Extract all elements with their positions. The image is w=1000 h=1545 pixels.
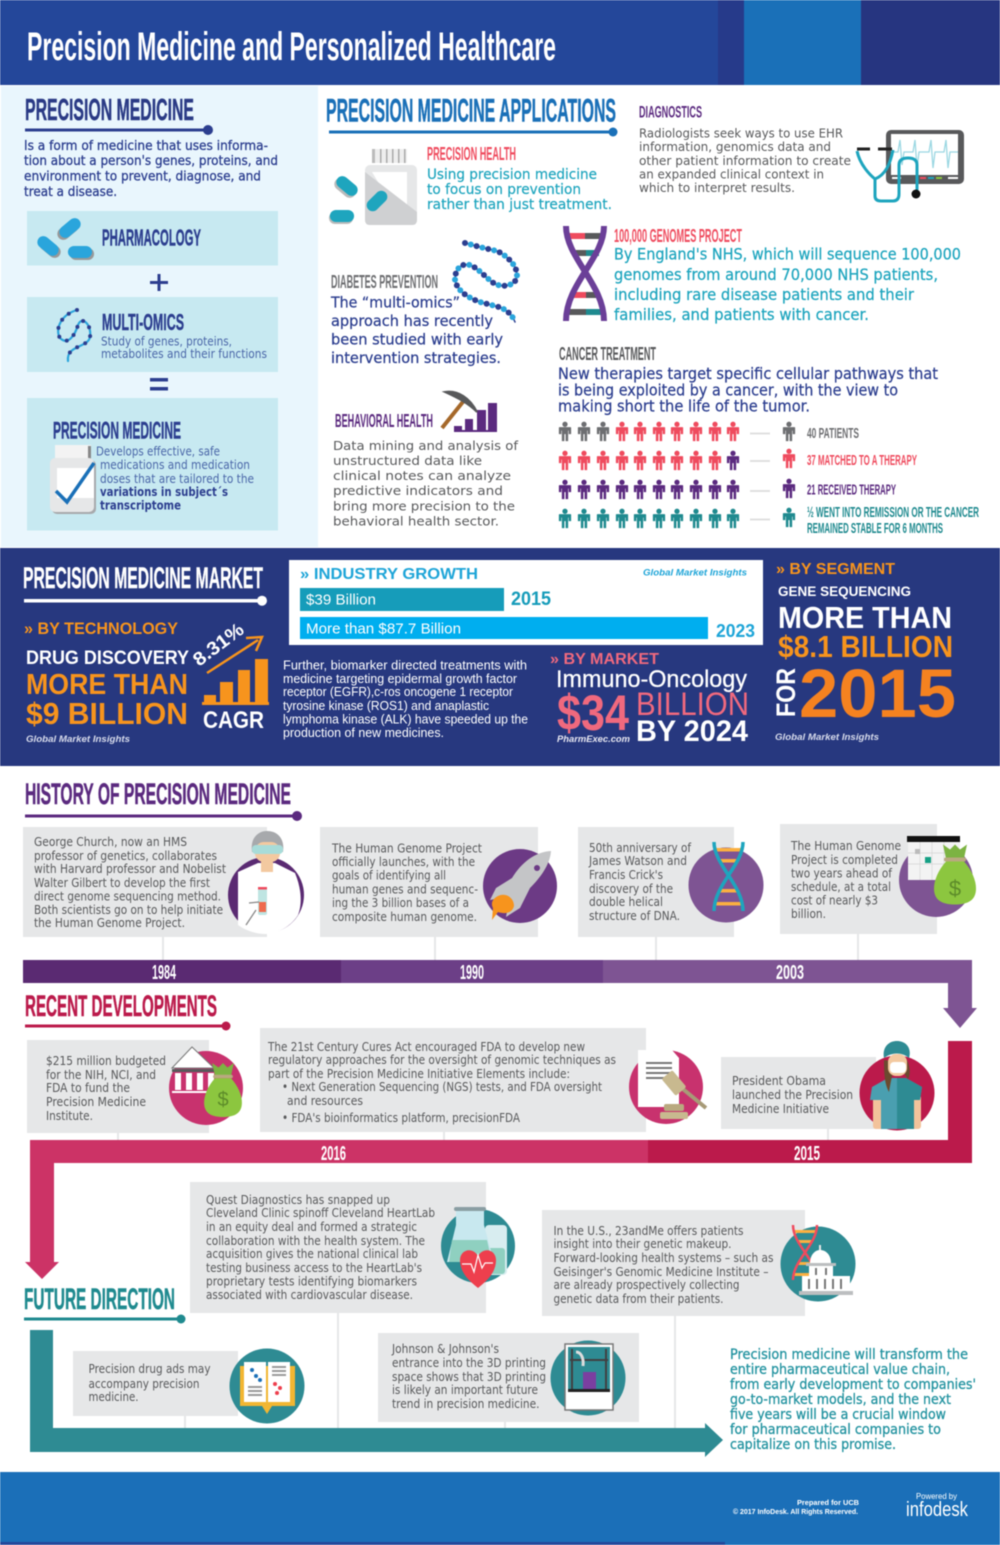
definition text: treat a disease. (24, 185, 117, 200)
card: Cures Act: regulatory approaches for the oversight of genomic techniques as (268, 1052, 616, 1067)
heading: precision medicine: PRECISION MEDICINE (25, 92, 194, 127)
chart: industry growth: $39 Billion (306, 592, 376, 608)
chart: industry growth (289, 560, 763, 645)
card: 23andMe: Forward-looking health systems – such as (554, 1250, 774, 1265)
card: 1984: Walter Gilbert to develop the first (34, 875, 210, 890)
block: cancer treatment (558, 344, 938, 416)
block: by segment (771, 561, 956, 743)
text: biomarker paragraph: production of new medicines. (283, 726, 444, 740)
icon: molecule chain (58, 310, 90, 361)
card: NIH budget (27, 1040, 209, 1133)
card: NIH budget: Precision Medicine (46, 1094, 146, 1109)
block: precision health: rather than just treatment. (427, 197, 612, 213)
pictogram chart: patients: 40 PATIENTS (807, 425, 859, 442)
heading: recent developments: RECENT DEVELOPMENTS (25, 990, 217, 1023)
block: cancer treatment: making short the life of the tumor. (558, 396, 810, 416)
block: by segment: » BY SEGMENT (776, 561, 895, 578)
block: by technology: MORE THAN (26, 669, 188, 701)
card: 2003 genome completed: schedule, at a total (791, 879, 891, 894)
card: 2015 Obama (721, 1057, 876, 1129)
card: 1990: officially launches, with the (332, 854, 475, 869)
text: closing statement: entire pharmaceutical value chain, (730, 1362, 950, 1378)
block: behavioral health: predictive indicators and (333, 484, 503, 498)
text: biomarker paragraph: Further, biomarker directed treatments with (283, 658, 527, 672)
heading: market: PRECISION MEDICINE MARKET (23, 562, 263, 595)
section: recent developments (25, 990, 972, 1279)
card: Cures Act: part of the Precision Medicine Initiative Elements include: (268, 1066, 570, 1081)
icon: plus (150, 274, 168, 291)
block: by technology (24, 619, 189, 745)
heading rule (329, 128, 618, 136)
icon: equals (150, 378, 168, 390)
block: 100,000 genomes project: By England's NHS, which will sequence 100,000 (614, 244, 961, 264)
block: by market: Immuno-Oncology (556, 666, 747, 693)
block: by technology: DRUG DISCOVERY (26, 648, 189, 669)
credit text: Prepared for UCB (797, 1500, 859, 1507)
icon: bottle with check (50, 445, 96, 514)
description: variations in subject´s (100, 485, 228, 499)
card: drug ads: medicine. (88, 1389, 138, 1404)
card: Johnson & Johnson (378, 1333, 639, 1422)
block: by segment: Global Market Insights (775, 732, 879, 743)
block: by technology: $9 BILLION (26, 696, 188, 731)
heading rule (24, 1314, 186, 1324)
block: by market: BY 2024 (636, 715, 748, 748)
block: precision health: PRECISION HEALTH (427, 144, 516, 164)
block: by technology: Global Market Insights (26, 734, 130, 745)
card: Johnson & Johnson: is likely an important future (392, 1382, 538, 1397)
icon: document and gavel (629, 1050, 706, 1124)
block: by segment: MORE THAN (778, 600, 952, 635)
panel: precision medicine applications: PRECISION MEDICINE APPLICATIONS (326, 92, 616, 128)
chart: industry growth: More than $87.7 Billion (306, 620, 461, 638)
block: by market: $34 (557, 685, 629, 741)
card: 1984: professor of genetics, collaborates (34, 848, 217, 863)
card: 2003 DNA anniversary (578, 827, 734, 937)
card: 1984: direct genome sequencing method. (34, 888, 221, 904)
card: 2015 Obama: Medicine Initiative (732, 1101, 829, 1116)
box: precision medicine result (27, 398, 278, 530)
card: 2003 DNA anniversary: Francis Crick's (589, 867, 663, 882)
card: 1984: George Church, now an HMS (34, 834, 187, 849)
card: NIH budget: FDA to fund the (46, 1080, 130, 1095)
card: 2003 DNA anniversary: structure of DNA. (589, 908, 680, 923)
block: diagnostics (639, 102, 851, 195)
card: Cures Act: • Next Generation Sequencing (NGS) tests, and FDA oversight (282, 1079, 602, 1094)
card: 1990: composite human genome. (332, 909, 477, 924)
heading rule (25, 125, 213, 135)
text: closing statement: go-to-market models, and the next (730, 1392, 951, 1408)
icon: institute and money bag (169, 1047, 243, 1125)
card: 1990: goals of identifying all (332, 868, 446, 882)
icon: DNA and capitol (780, 1225, 856, 1302)
footer band (0, 1472, 1000, 1545)
card: 1990: human genes and sequenc- (332, 882, 478, 896)
text: closing statement: five years will be a crucial window (730, 1407, 946, 1423)
card: Cures Act: and resources (287, 1093, 363, 1108)
section: history of precision medicine (23, 778, 977, 1028)
block: behavioral health (333, 411, 519, 528)
block: precision health (427, 144, 612, 213)
label: multi-omics: MULTI-OMICS (102, 309, 184, 335)
description: Study of genes, proteins, (101, 334, 232, 348)
header band (0, 0, 1000, 85)
icon: molecule chain large (455, 243, 517, 322)
box: pharmacology (27, 211, 278, 266)
definition text (24, 139, 278, 200)
card: Johnson & Johnson: space shows that 3D printing (392, 1369, 546, 1384)
definition text: Is a form of medicine that uses informa- (24, 139, 268, 154)
icon: institute and money bag: $ (217, 1089, 229, 1111)
heading: future direction: FUTURE DIRECTION (24, 1283, 175, 1316)
card: 2003 DNA anniversary: discovery of the (589, 881, 673, 896)
card: 2003 genome completed: The Human Genome (790, 838, 901, 853)
card: 2003 genome completed: Project is completed (791, 852, 898, 867)
block: behavioral health: Data mining and analysis of (333, 439, 519, 453)
credit text (733, 1500, 859, 1516)
card: 1984 (23, 827, 267, 937)
text: closing statement: for pharmaceutical companies to (730, 1422, 941, 1438)
card: 1984: Both scientists go on to help initiate (34, 902, 223, 917)
card: 2015 Obama: launched the Precision (732, 1087, 853, 1102)
block: by market: » BY MARKET (550, 651, 659, 668)
description: medications and medication (100, 458, 250, 472)
block: 100,000 genomes project: families, and patients with cancer. (614, 305, 869, 324)
card: Quest Diagnostics: collaboration with the health system. The (206, 1233, 425, 1248)
description: transcriptome (100, 498, 181, 512)
card: Quest Diagnostics (190, 1182, 486, 1313)
block: diagnostics: DIAGNOSTICS (639, 102, 702, 122)
text: biomarker paragraph: medicine targeting epidermal growth factor (283, 672, 517, 686)
card: Johnson & Johnson: entrance into the 3D printing (392, 1355, 546, 1370)
icon: 3D printer (550, 1340, 626, 1416)
block: 100,000 genomes project (614, 226, 961, 324)
block: diagnostics: which to interpret results. (639, 181, 795, 195)
logo: infodesk (906, 1492, 969, 1521)
block: behavioral health: clinical notes can analyze (333, 469, 511, 483)
card: Cures Act: • FDA's bioinformatics platform, precisionFDA (282, 1110, 520, 1125)
card: 23andMe: In the U.S., 23andMe offers patients (554, 1223, 744, 1238)
icon: calendar and money bag (899, 836, 976, 917)
credit text: © 2017 InfoDesk. All Rights Reserved. (733, 1508, 858, 1516)
card: Cures Act: The 21st Century Cures Act encouraged FDA to develop new (267, 1039, 585, 1054)
block: behavioral health: bring more precision to the (333, 500, 515, 514)
block: diabetes prevention: approach has recently (331, 312, 493, 330)
card: 23andMe: are already prospectively collecting (554, 1277, 740, 1292)
block: by segment: 2015 (799, 655, 956, 732)
icon: pills (35, 216, 94, 260)
title: Precision Medicine and Personalized Healthcare (27, 25, 556, 69)
card: 23andMe (542, 1210, 805, 1316)
text: biomarker paragraph (283, 658, 528, 740)
heading: history: HISTORY OF PRECISION MEDICINE (25, 778, 291, 811)
card: drug ads (73, 1351, 238, 1416)
block: precision health: Using precision medicine (427, 167, 597, 183)
description: doses that are tailored to the (100, 472, 254, 486)
card: NIH budget: Institute. (46, 1108, 93, 1123)
block: diagnostics: an expanded clinical context in (639, 168, 824, 182)
icon: pickaxe and bars (442, 392, 497, 432)
block: 100,000 genomes project: including rare disease patients and their (614, 285, 914, 304)
description (101, 334, 267, 361)
card: Cures Act (260, 1028, 646, 1132)
block: cancer treatment: is being exploited by a cancer, with the view to (558, 380, 898, 400)
card: 2003 genome completed: billion. (791, 906, 826, 921)
card: 1990: The Human Genome Project (331, 840, 482, 856)
card: 2003 DNA anniversary: 50th anniversary of (589, 840, 691, 855)
block: precision health: to focus on prevention (427, 182, 581, 198)
chart: industry growth: » INDUSTRY GROWTH (300, 566, 478, 583)
card: Quest Diagnostics: associated with cardiovascular disease. (206, 1287, 413, 1302)
block: by segment: FOR (771, 668, 801, 717)
card: 2015 Obama: President Obama (732, 1073, 826, 1088)
chart icon: CAGR: CAGR (203, 707, 264, 734)
heading rule (25, 811, 302, 821)
block: diabetes prevention (330, 272, 503, 367)
card: 1984: the Human Genome Project. (34, 915, 185, 930)
card: 23andMe: insight into their genetic makeup. (554, 1236, 732, 1251)
timeline bar: history (23, 960, 977, 1028)
chart icon: CAGR: 8.31% (189, 619, 248, 671)
pictogram chart: patients: 21 RECEIVED THERAPY (807, 482, 896, 498)
block: diagnostics: Radiologists seek ways to use EHR (639, 126, 843, 140)
card: Quest Diagnostics: testing business access to the HeartLab's (206, 1260, 422, 1275)
card: 2003 genome completed (780, 824, 937, 934)
heading rule (25, 1022, 230, 1030)
block: diagnostics: other patient information to create (639, 154, 851, 168)
card: Quest Diagnostics: Quest Diagnostics has snapped up (206, 1192, 390, 1207)
card: 2003 DNA anniversary: double helical (589, 894, 663, 909)
block: 100,000 genomes project: 100,000 GENOMES PROJECT (614, 226, 742, 246)
icon: flask and heart (441, 1207, 515, 1288)
chart: industry growth: 2023 (716, 621, 755, 641)
block: 100,000 genomes project: genomes from around 70,000 NHS patients, (614, 265, 938, 284)
text: closing statement: from early development to companies' (730, 1377, 976, 1393)
box: precision medicine result: PRECISION MEDICINE (53, 418, 181, 444)
card: NIH budget: $215 million budgeted (46, 1053, 166, 1068)
icon: scientist (228, 831, 304, 934)
block: by segment: $8.1 BILLION (778, 629, 953, 664)
box: pharmacology: PHARMACOLOGY (102, 224, 201, 250)
box: multi-omics (27, 297, 278, 372)
section: future direction (24, 1182, 976, 1457)
timeline bar: recent: 2015 (794, 1143, 820, 1165)
definition text: tion about a person's genes, proteins, and (24, 154, 278, 169)
block: diabetes prevention: been studied with early (331, 330, 503, 348)
description: Develops effective, safe (96, 444, 220, 458)
timeline bar: history: 1984 (152, 962, 176, 984)
text: closing statement: capitalize on this promise. (730, 1437, 896, 1453)
chart: industry growth: Global Market Insights (643, 568, 747, 578)
block: diabetes prevention: intervention strategies. (331, 349, 501, 367)
chart icon: CAGR (189, 619, 269, 734)
block: by market: BILLION (636, 686, 749, 722)
timeline bar: history: 1990 (460, 962, 484, 984)
definition text: environment to prevent, diagnose, and (24, 170, 261, 184)
heading rule (24, 596, 267, 606)
timeline bar: recent: 2016 (321, 1143, 346, 1165)
text: biomarker paragraph: tyrosine kinase (ROS1) and anaplastic (283, 699, 489, 713)
text: closing statement (730, 1347, 976, 1453)
card: 2003 genome completed: cost of nearly $3 (791, 892, 878, 908)
card: Quest Diagnostics: in an equity deal and formed a strategic (206, 1219, 417, 1234)
icon: bottle and pills (329, 149, 417, 225)
block: behavioral health: behavioral health sector. (333, 514, 499, 528)
block: behavioral health: BEHAVIORAL HEALTH (335, 411, 433, 431)
card: 1990 (320, 827, 538, 937)
text: biomarker paragraph: receptor (EGFR),c-ros oncogene 1 receptor (283, 685, 513, 699)
icon: open book (230, 1348, 304, 1424)
card: Quest Diagnostics: proprietary tests identifying biomarkers (206, 1274, 417, 1288)
block: cancer treatment: CANCER TREATMENT (559, 344, 656, 364)
block: by technology: » BY TECHNOLOGY (24, 619, 179, 638)
logo: infodesk: infodesk (906, 1499, 969, 1521)
card: Johnson & Johnson: trend in precision medicine. (392, 1396, 540, 1411)
icon: tablet and stethoscope (857, 130, 964, 201)
card: drug ads: Precision drug ads may (88, 1361, 211, 1376)
block: cancer treatment: New therapies target specific cellular pathways that (558, 364, 938, 383)
icon: calendar and money bag: $ (949, 876, 961, 901)
timeline bar: history: 2003 (776, 962, 804, 984)
description (96, 444, 254, 512)
block: by market: PharmExec.com (557, 734, 631, 745)
text: biomarker paragraph: lymphoma kinase (ALK) have speeded up the (283, 712, 528, 726)
block: diagnostics: information, genomics data and (639, 140, 831, 154)
card: 23andMe: Geisinger's Genomic Medicine Institute – (554, 1264, 768, 1279)
timeline arrow: future (30, 1330, 723, 1457)
card: Quest Diagnostics: acquisition gives the national clinical lab (206, 1246, 418, 1261)
block: diabetes prevention: The “multi-omics” (330, 294, 460, 312)
icon: nurse (860, 1041, 934, 1130)
card: Quest Diagnostics: Cleveland Clinic spinoff Cleveland HeartLab (206, 1205, 435, 1220)
card: 23andMe: genetic data from their patients. (554, 1291, 724, 1306)
icon: DNA helix (566, 226, 604, 321)
icon: DNA circle (688, 842, 764, 922)
block: by market (550, 651, 749, 748)
card: Johnson & Johnson: Johnson & Johnson's (391, 1341, 499, 1356)
block: by segment: GENE SEQUENCING (778, 583, 911, 599)
card: NIH budget: for the NIH, NCI, and (46, 1067, 156, 1082)
description: metabolites and their functions (101, 347, 267, 361)
logo: infodesk: Powered by (916, 1492, 957, 1501)
panel: precision medicine definition (1, 86, 318, 547)
icon: rocket (483, 849, 557, 923)
chart: industry growth: 2015 (511, 589, 551, 610)
card: 1990: ing the 3 billion bases of a (332, 895, 469, 910)
block: diabetes prevention: DIABETES PREVENTION (331, 272, 438, 292)
block: behavioral health: unstructured data like (333, 454, 482, 468)
timeline bar: recent (25, 1041, 972, 1279)
card: 2003 genome completed: two years ahead of (791, 866, 892, 880)
card: 1984: with Harvard professor and Nobelist (34, 861, 226, 876)
card: drug ads: accompany precision (88, 1376, 200, 1391)
pictogram chart: patients (559, 422, 979, 537)
text: closing statement: Precision medicine will transform the (730, 1347, 968, 1363)
panel: precision medicine market (0, 548, 1000, 766)
card: 2003 DNA anniversary: James Watson and (588, 853, 687, 868)
panel: precision medicine applications (326, 92, 979, 537)
